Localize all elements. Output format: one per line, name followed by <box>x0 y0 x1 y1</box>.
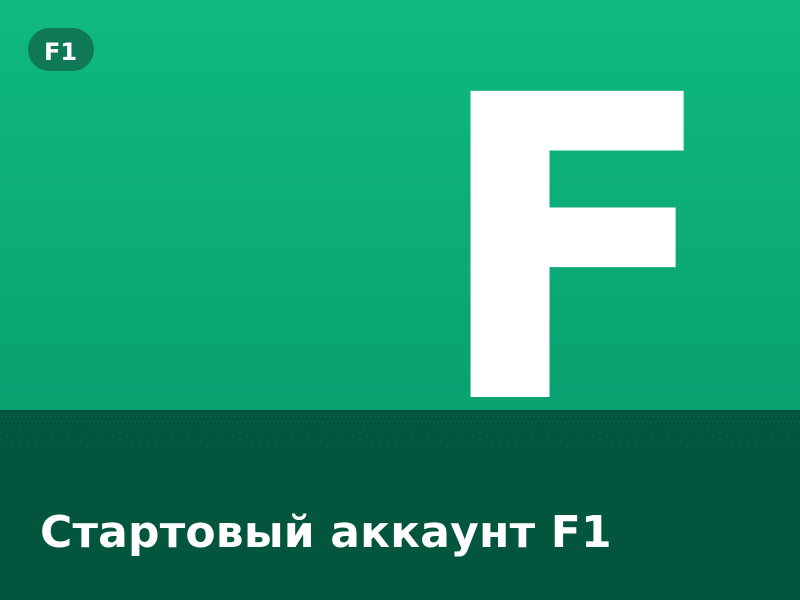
green gradient background <box>0 0 800 410</box>
big letter F: F <box>432 8 719 497</box>
title: Стартовый аккаунт F1 <box>40 507 612 558</box>
badge: F1: F1 <box>44 38 77 66</box>
badge: F1 <box>28 28 94 71</box>
dark bottom panel <box>0 410 800 600</box>
